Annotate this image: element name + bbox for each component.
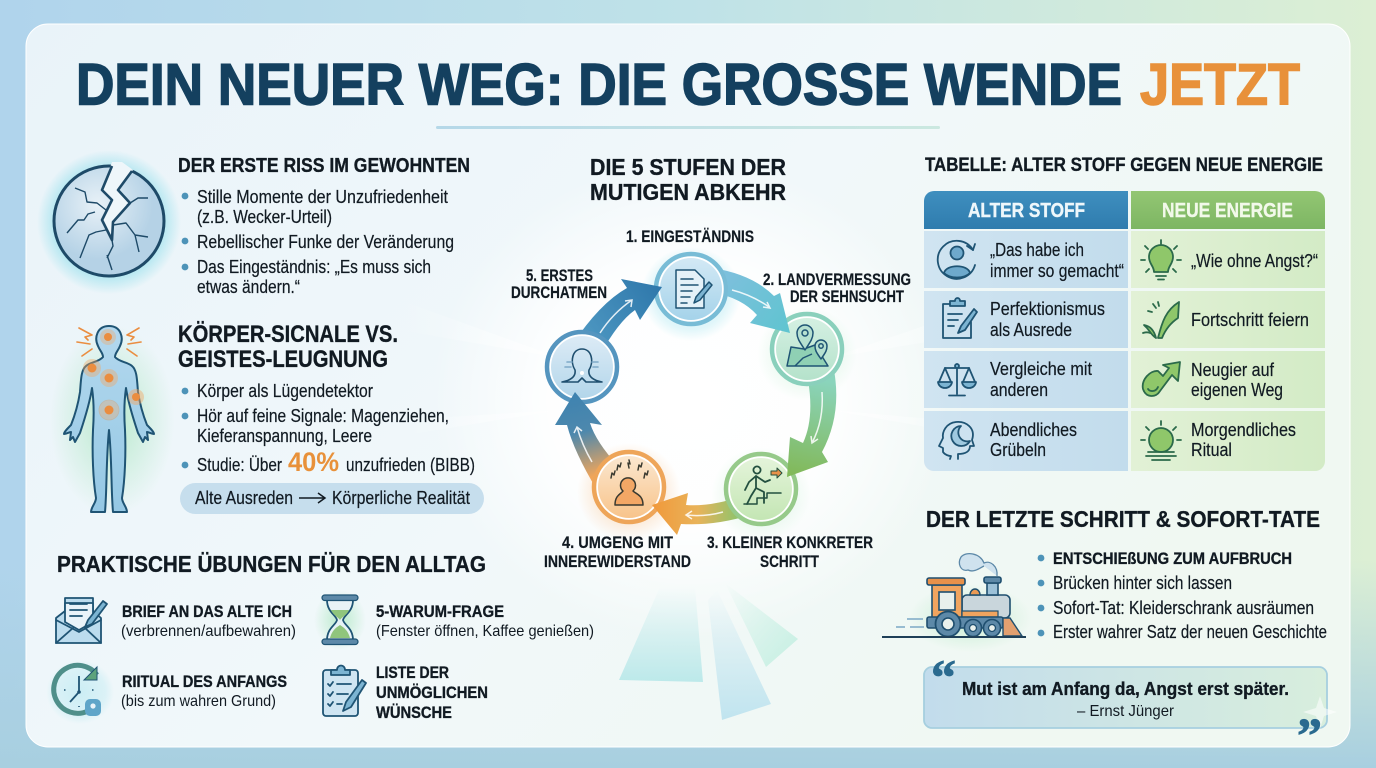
row 3 left [924,351,1128,408]
exercise: warum: (Fenster öffnen, Kaffee genießen) [376,623,594,640]
quote box [924,649,1337,763]
panel: körper-signale [50,321,484,515]
label: 4. UMGENG MIT [562,534,673,552]
icon: growth arrow [1143,362,1180,396]
label [707,534,873,571]
bullet list: etwas ändern.“ [197,277,300,297]
label: INNEREWIDERSTAND [544,553,691,571]
quote box: – Ernst Jünger [1077,703,1175,720]
row 2 right [1131,291,1325,348]
icon: cracked circle [37,150,181,294]
exercise: brief: (verbrennen/aufbewahren) [121,623,296,640]
icon: hourglass [314,590,366,650]
icon: clipboard with checks [323,666,366,716]
heading: DIE 5 STUFEN DER [590,154,786,180]
icon: light bulb [1141,240,1181,280]
bullet list: Hör auf feine Signale: Magenziehen, [197,406,449,426]
heading: MUTIGEN ABKEHR [590,179,786,205]
heading: DER LETZTE SCHRITT & SOFORT-TATE [926,506,1320,532]
bullet list [1038,549,1327,642]
bullet list: Stille Momente der Unzufriedenheit [197,187,448,207]
pill: alte ausreden: Alte Ausreden [195,488,293,508]
icon: person with bolts [611,460,648,505]
quote box: Mut ist am Anfang da, Angst erst später. [962,678,1289,699]
arrow: 5 to 1 [582,279,662,341]
icon: body figure [50,325,174,515]
exercise: brief: BRIEF AN DAS ALTE ICH [122,602,292,621]
exercise: ritual: (bis zum wahren Grund) [121,693,276,710]
row 4 right: Morgendliches [1191,420,1296,440]
icon: document with pen [676,270,712,308]
row 1 right: „Wie ohne Angst?“ [1191,251,1318,271]
exercise: liste [323,663,488,722]
step 5 [511,267,617,402]
exercise: liste: WÜNSCHE [376,703,452,722]
row 4 right: Ritual [1191,440,1232,460]
icon: clipboard with pen [943,298,977,338]
panel: praktische übungen [46,551,594,724]
bullet list: Rebellischer Funke der Veränderung [197,232,454,252]
bullet list: Sofort-Tat: Kleiderschrank ausräumen [1053,598,1314,618]
row 3 right: eigenen Weg [1191,380,1283,400]
step 2 [757,271,911,401]
table header: alter stoff: ALTER STOFF [968,200,1085,222]
heading: KÖRPER-SICNALE VS. [178,321,398,348]
icon: rising sun [1141,421,1181,460]
exercise: warum [314,590,594,650]
bullet list: Erster wahrer Satz der neuen Geschichte [1053,622,1327,642]
icon: map with pins [787,325,828,366]
table header: neue energie [1131,191,1325,229]
exercise: liste: UNMÖGLICHEN [376,683,488,702]
step 1 [626,228,754,341]
arrow: 3 to 4 [652,493,738,535]
row 4 right [1131,411,1325,471]
bullet list [182,381,475,477]
row 4 left: Abendliches [990,420,1077,440]
row 1 left: immer so gemacht“ [990,261,1124,281]
label [763,271,911,306]
bullet list: Das Eingeständnis: „Es muss sich [197,257,431,277]
exercise: ritual [46,660,287,724]
title: DEIN NEUER WEG: DIE GROSSE WENDE [76,52,1122,118]
arrow: 2 to 3 [787,370,836,477]
bullet list: Kieferanspannung, Leere [197,426,372,446]
table header: alter stoff [924,191,1128,229]
exercise: ritual: RIITUAL DES ANFANGS [122,672,287,691]
row 3 right: Neugier auf [1191,360,1275,380]
bullet list: 40% [288,447,339,477]
label: 1. EINGESTÄNDNIS [626,228,754,246]
label: 3. KLEINER KONKRETER [707,534,873,552]
icon: envelope [56,598,107,643]
arrow: 1 to 2 [723,270,790,333]
panel: der erste riss [37,150,470,297]
table header: neue energie: NEUE ENERGIE [1162,200,1293,222]
icon: train [882,554,1032,652]
row 1 left [924,231,1128,288]
step 4 [544,443,691,571]
exercise: liste: LISTE DER [376,663,449,682]
label: 2. LANDVERMESSUNG [763,271,911,289]
icon: clock [46,660,114,724]
heading: TABELLE: ALTER STOFF GEGEN NEUE ENERGIE [925,154,1323,176]
label: SCHRITT [760,553,819,571]
row 1 right [1131,231,1325,288]
step 3 [707,447,873,571]
row 1 left: „Das habe ich [990,240,1084,260]
quote box: “ [931,649,956,705]
bullet list: Studie: Über [197,455,282,475]
exercise: brief [56,598,296,643]
heading: GEISTES-LEUGNUNG [178,346,388,373]
label: 5. ERSTES [526,267,593,285]
exercise: warum: 5-WARUM-FRAGE [376,602,504,621]
icon: person cycle [938,241,975,279]
light rays [619,583,798,720]
bullet list: ENTSCHIEßUNG ZUM AUFBRUCH [1053,549,1292,568]
bullet list: Körper als Lügendetektor [197,381,373,401]
icon: head with moon [939,422,974,459]
bullet list: Brücken hinter sich lassen [1053,573,1232,593]
label [544,534,691,571]
icon: scales [938,364,976,396]
pill: alte ausreden: Körperliche Realität [332,488,470,508]
heading: DER ERSTE RISS IM GEWOHNTEN [178,154,470,177]
bullet list [182,187,454,297]
row 3 left: anderen [990,380,1048,400]
row 2 left [924,291,1128,348]
bullet list: (z.B. Wecker-Urteil) [197,207,332,227]
row 2 left: als Ausrede [990,320,1072,340]
label [511,267,607,302]
heading: PRAKTISCHE ÜBUNGEN FÜR DEN ALLTAG [57,551,486,577]
panel: die 5 stufen [511,154,911,720]
title: JETZT [1140,52,1300,118]
heading [178,321,398,373]
icon: breathing person [562,349,602,382]
icon: sprout [1143,302,1179,338]
row 2 left: Perfektionismus [990,299,1105,319]
row 4 left [924,411,1128,471]
row 3 left: Vergleiche mit [990,359,1092,379]
panel: der letzte schritt [882,506,1337,763]
label: DURCHATMEN [511,284,607,302]
label: DER SEHNSUCHT [790,288,904,306]
quote box: ” [1297,707,1322,763]
icon: person on stairs [744,466,782,504]
heading [590,154,786,205]
row 3 right [1131,351,1325,408]
row 4 left: Grübeln [990,440,1046,460]
bullet list: unzufrieden (BIBB) [346,455,475,475]
row 2 right: Fortschritt feiern [1191,310,1309,330]
pill: alte ausreden [180,483,484,514]
arrow: 4 to 5 [555,392,610,482]
panel: tabelle [924,154,1325,471]
